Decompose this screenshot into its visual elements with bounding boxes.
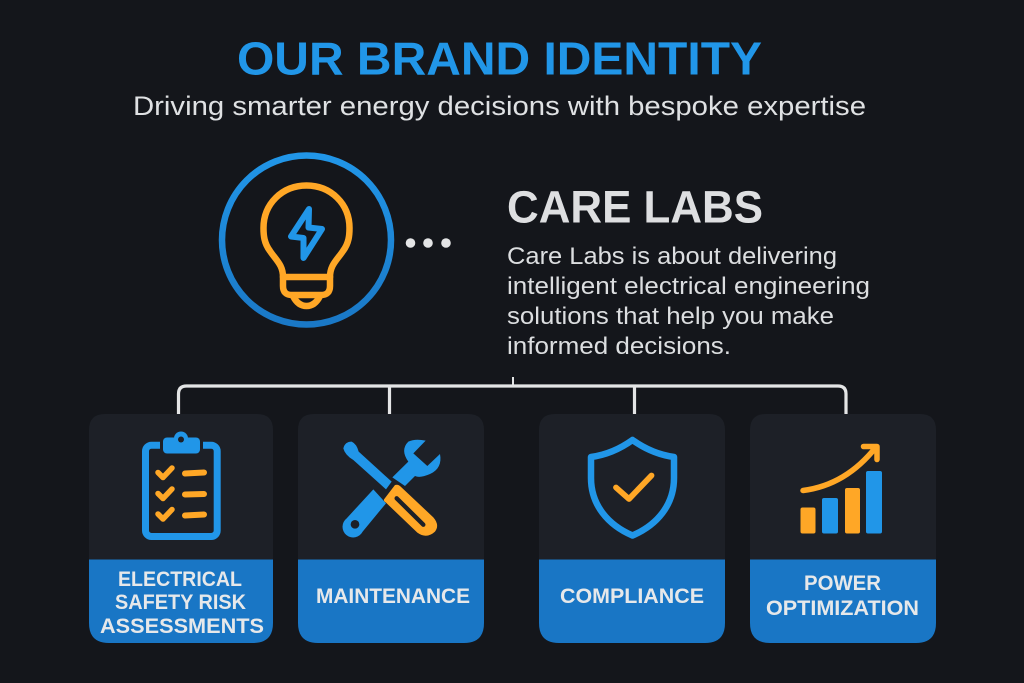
label: electrical safety risk assessments: ELECTRICAL <box>118 568 242 591</box>
icon: shield with check <box>591 440 674 536</box>
label: maintenance: MAINTENANCE <box>316 585 470 608</box>
label: power optimization: OPTIMIZATION <box>766 597 919 620</box>
label: electrical safety risk assessments: SAFETY RISK <box>115 591 246 614</box>
icon: clipboard checklist <box>146 432 217 536</box>
icon: light bulb in circle <box>222 156 391 324</box>
label: electrical safety risk assessments: ASSESSMENTS <box>100 615 264 638</box>
description text: solutions that help you make <box>507 303 834 330</box>
label: compliance: COMPLIANCE <box>560 585 704 608</box>
description text: informed decisions. <box>507 333 731 360</box>
heading: Care Labs: CARE LABS <box>507 182 763 232</box>
icon: crossed screwdriver and wrench <box>343 440 440 537</box>
label: power optimization <box>766 572 919 620</box>
panel: maintenance <box>298 414 484 643</box>
label: power optimization: POWER <box>804 572 881 595</box>
connector lines <box>178 377 846 414</box>
panel: power optimization <box>750 414 936 643</box>
subtitle: Driving smarter energy decisions with bespoke expertise <box>133 91 866 121</box>
description text <box>507 243 870 360</box>
description text: intelligent electrical engineering <box>507 273 870 300</box>
label: electrical safety risk assessments <box>100 568 264 638</box>
panel: electrical safety risk assessments <box>89 414 273 643</box>
icon: rising bar chart <box>800 446 882 534</box>
panel: compliance <box>539 414 725 643</box>
title: OUR BRAND IDENTITY <box>237 32 762 84</box>
description text: Care Labs is about delivering <box>507 243 837 270</box>
icon: three dots <box>406 238 451 248</box>
